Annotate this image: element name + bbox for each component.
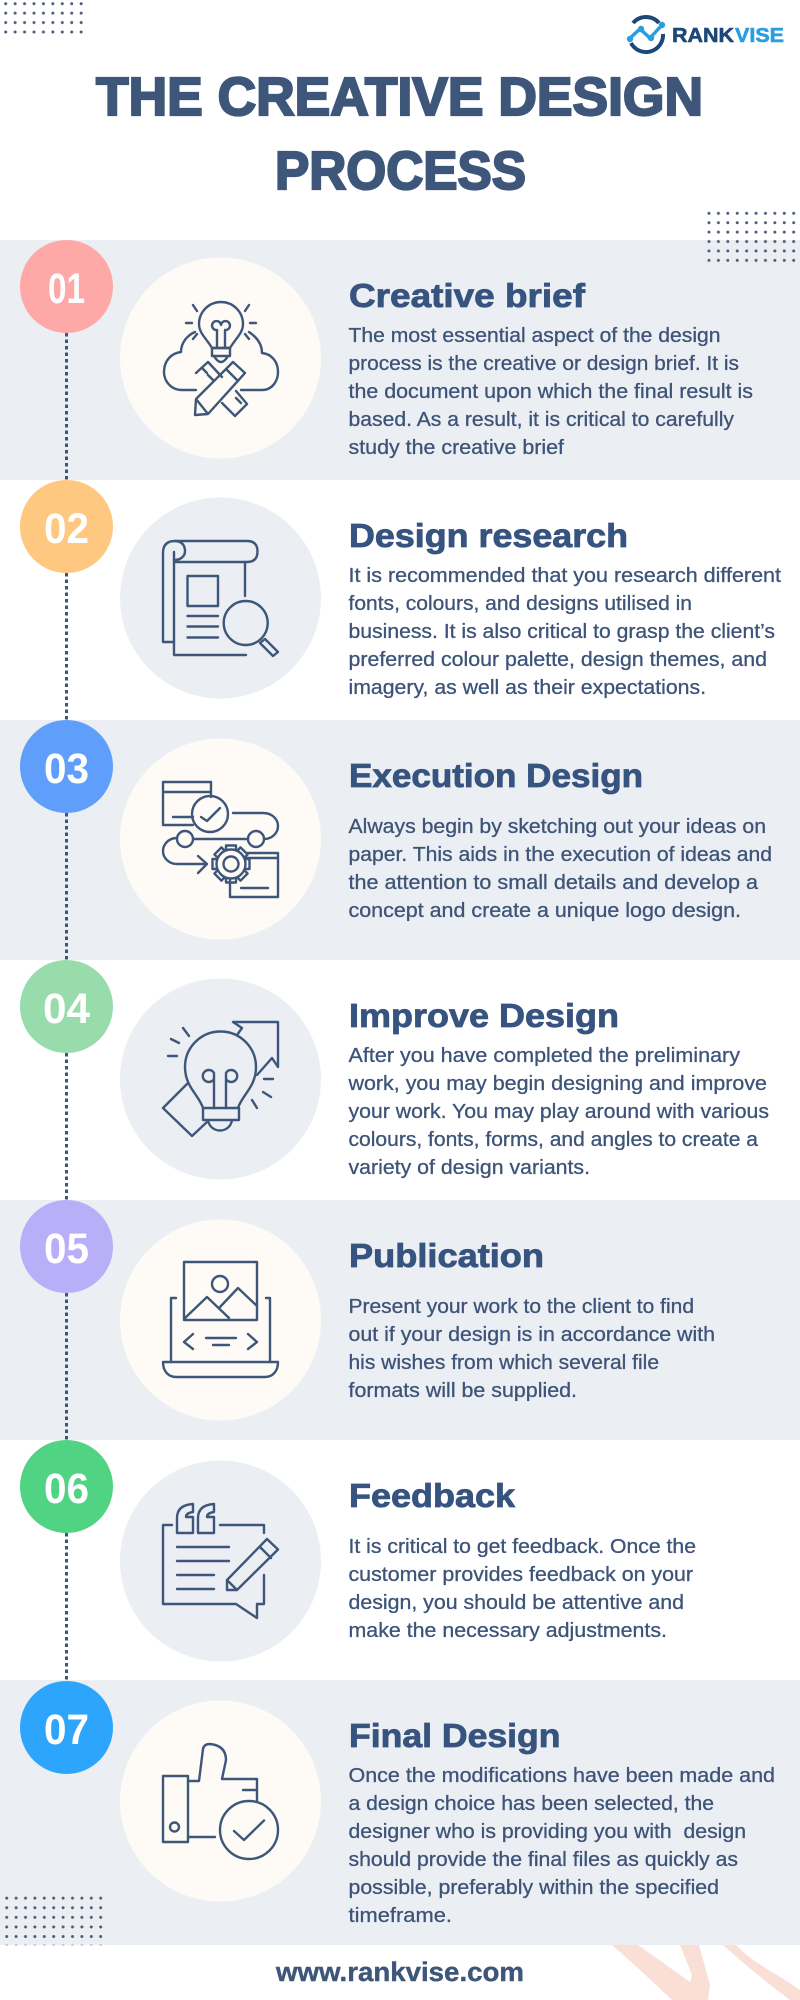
heading: Execution Design	[349, 757, 643, 794]
number badge 02: 02	[44, 505, 89, 553]
body text: based. As a result, it is critical to carefully	[348, 408, 735, 431]
body text: It is recommended that you research different	[348, 564, 781, 587]
icon circle 3	[120, 738, 321, 940]
body text: customer provides feedback on your	[348, 1563, 693, 1586]
heading: Final Design	[349, 1717, 560, 1754]
dot pattern: bottom left	[2, 1893, 105, 1945]
panel: step 03 execution design	[20, 720, 772, 960]
number badge 05: 05	[44, 1225, 89, 1273]
icon circle 4	[120, 978, 321, 1180]
icon circle 7	[120, 1700, 321, 1902]
body text	[347, 1044, 769, 1179]
body text: designer who is providing you with design	[348, 1820, 746, 1843]
number badge 01	[20, 240, 113, 333]
body text: fonts, colours, and designs utilised in	[348, 592, 692, 615]
body text	[348, 815, 772, 922]
dot pattern: top right	[704, 209, 798, 265]
title	[96, 67, 703, 201]
number badge 05	[20, 1200, 113, 1293]
timeline connector 2	[65, 573, 68, 720]
heading: Publication	[349, 1237, 544, 1274]
icon circle 6	[120, 1460, 321, 1662]
icon: bulb, cloud and tools	[164, 302, 278, 416]
number badge 03: 03	[44, 745, 89, 793]
body text: work, you may begin designing and improve	[347, 1072, 767, 1095]
dot pattern: top left	[1, 0, 86, 37]
icon: document and magnifier	[163, 541, 278, 656]
body text: study the creative brief	[348, 436, 564, 459]
number badge 06	[20, 1440, 113, 1533]
body text: Always begin by sketching out your ideas on	[348, 815, 766, 838]
icon circle 2	[120, 498, 321, 698]
band: row 5	[0, 1200, 800, 1440]
body text: make the necessary adjustments.	[348, 1619, 667, 1642]
heading: Creative brief	[349, 277, 586, 314]
timeline connector 3	[65, 813, 68, 960]
heading: Improve Design	[349, 997, 619, 1034]
number badge 04	[20, 960, 113, 1053]
icon: feedback speech bubble	[163, 1504, 278, 1618]
logo: Rankvise: RANK	[672, 24, 734, 47]
panel: step 04 improve design	[20, 960, 769, 1200]
body text: imagery, as well as their expectations.	[348, 676, 706, 699]
number badge 03	[20, 720, 113, 813]
body text	[348, 1764, 775, 1927]
body text: should provide the final files as quickly as	[348, 1848, 738, 1871]
body text: paper. This aids in the execution of ideas and	[348, 843, 772, 866]
body text	[348, 1295, 715, 1402]
icon circle 1	[120, 258, 321, 458]
band: row 3	[0, 720, 800, 960]
number badge 01: 01	[48, 265, 85, 313]
number badge 02	[20, 480, 113, 573]
number badge 07: 07	[44, 1706, 89, 1754]
body text: It is critical to get feedback. Once the	[348, 1535, 696, 1558]
icon: laptop with picture	[163, 1262, 278, 1377]
body text: preferred colour palette, design themes, and	[348, 648, 767, 671]
title: THE CREATIVE DESIGN	[96, 67, 703, 127]
icon circle 5	[120, 1220, 321, 1420]
body text: The most essential aspect of the design	[348, 324, 720, 347]
panel: step 01 creative brief	[20, 240, 753, 480]
body text: out if your design is in accordance with	[348, 1323, 715, 1346]
body text: concept and create a unique logo design.	[348, 899, 741, 922]
icon: workflow	[163, 782, 278, 897]
panel: step 05 publication	[20, 1200, 715, 1440]
panel: step 06 feedback	[20, 1440, 696, 1680]
logo: Rankvise: VISE	[735, 24, 784, 47]
footer url: www.rankvise.com	[275, 1957, 524, 1987]
body text: Present your work to the client to find	[348, 1295, 694, 1318]
band: row 7	[0, 1680, 800, 1945]
timeline connector 1	[65, 333, 68, 480]
body text: his wishes from which several file	[348, 1351, 659, 1374]
number badge 07	[20, 1681, 113, 1774]
body text: timeframe.	[348, 1904, 452, 1927]
body text	[348, 1535, 696, 1642]
timeline connector 5	[65, 1293, 68, 1440]
icon: bulb and arrow	[163, 1022, 278, 1136]
body text: business. It is also critical to grasp the client’s	[348, 620, 775, 643]
band: row 1	[0, 240, 800, 480]
body text: Once the modifications have been made and	[348, 1764, 775, 1787]
panel: step 02 design research	[20, 480, 781, 720]
body text: possible, preferably within the specified	[348, 1876, 719, 1899]
body text: the document upon which the final result is	[348, 380, 753, 403]
body text	[348, 324, 753, 459]
body text: your work. You may play around with various	[348, 1100, 769, 1123]
timeline connector 6	[65, 1533, 68, 1680]
body text: the attention to small details and develop a	[348, 871, 759, 894]
body text: process is the creative or design brief. It is	[348, 352, 739, 375]
body text: a design choice has been selected, the	[348, 1792, 714, 1815]
body text	[348, 564, 781, 699]
panel: step 07 final design	[20, 1681, 775, 1927]
heading: Feedback	[349, 1477, 516, 1514]
decorative pink brush strokes	[612, 1945, 800, 2000]
title: PROCESS	[275, 141, 526, 201]
number badge 04: 04	[43, 985, 90, 1033]
logo: Rankvise	[627, 17, 784, 52]
timeline connector 4	[65, 1053, 68, 1200]
body text: design, you should be attentive and	[348, 1591, 684, 1614]
icon: thumbs up with check	[163, 1744, 278, 1859]
body text: After you have completed the preliminary	[348, 1044, 741, 1067]
body text: colours, fonts, forms, and angles to create a	[348, 1128, 759, 1151]
body text: variety of design variants.	[348, 1156, 590, 1179]
body text: formats will be supplied.	[348, 1379, 577, 1402]
heading: Design research	[349, 517, 628, 554]
number badge 06: 06	[44, 1465, 89, 1513]
